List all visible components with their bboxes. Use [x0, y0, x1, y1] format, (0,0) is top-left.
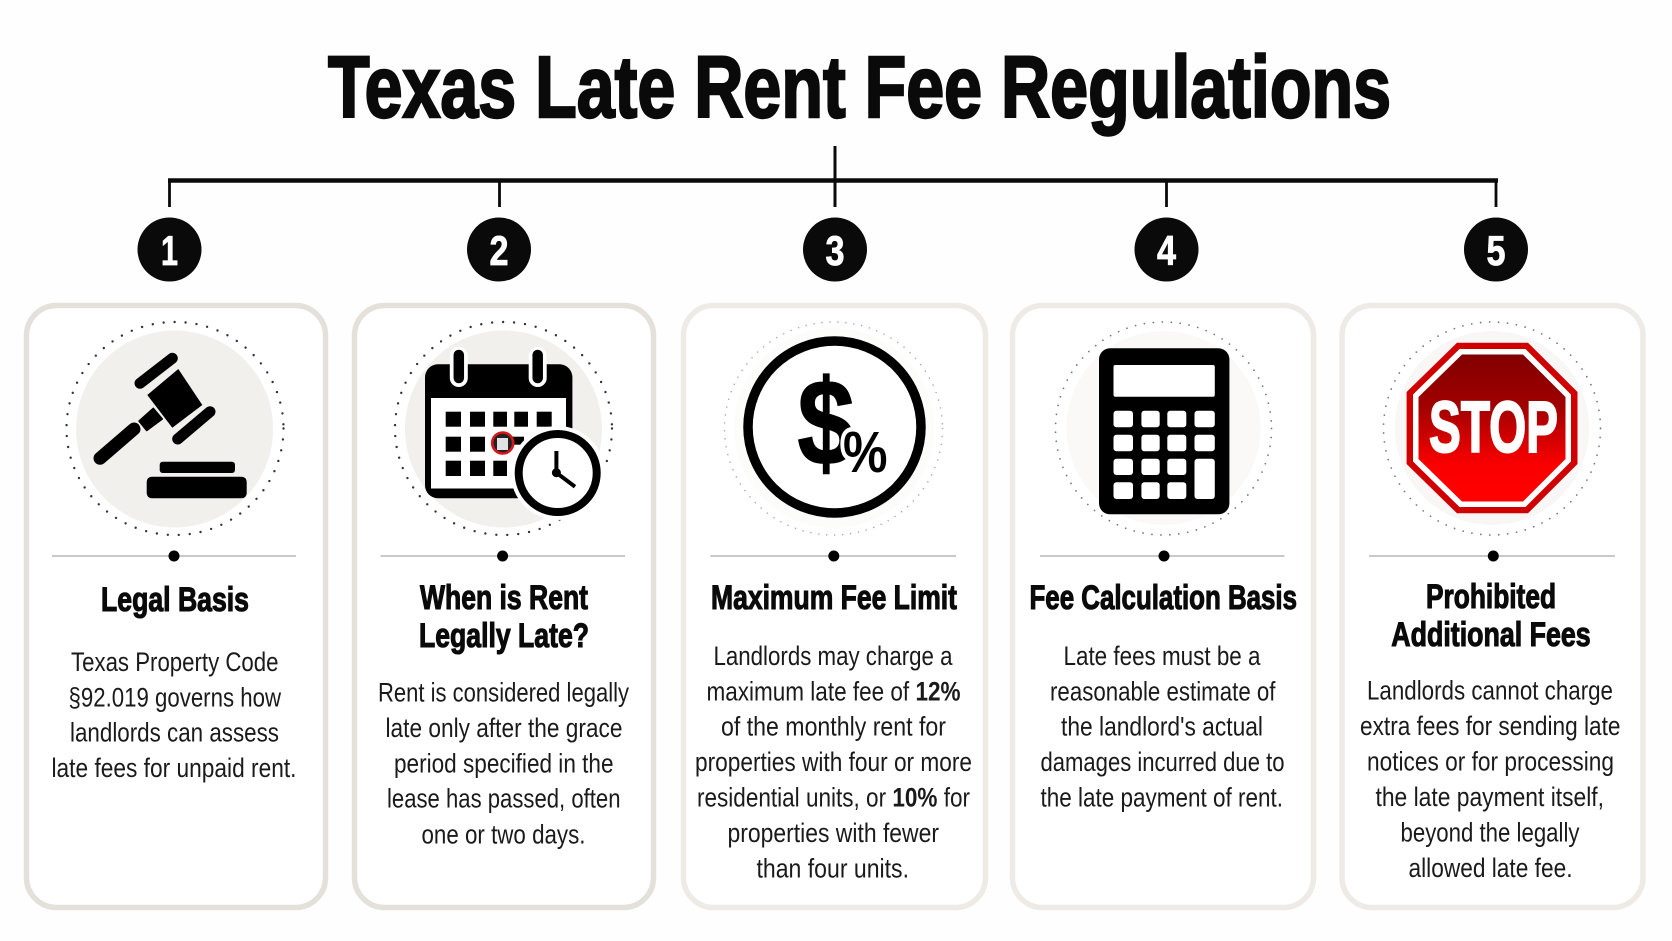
- divider: [52, 550, 296, 562]
- step number 1: [138, 218, 202, 282]
- body text: Landlords cannot charge: [1367, 675, 1613, 705]
- step number 5: 5: [1486, 227, 1506, 274]
- body text: Landlords may charge a: [714, 641, 953, 671]
- body text: beyond the legally: [1400, 818, 1580, 848]
- step number 5: [1464, 218, 1528, 282]
- step number 4: [1134, 218, 1198, 282]
- step number 3: [803, 218, 867, 282]
- body text: [378, 678, 630, 849]
- connector tree: [168, 146, 1498, 207]
- body text: damages incurred due to: [1040, 747, 1284, 777]
- body text: late only after the grace: [386, 713, 622, 743]
- heading: [1391, 578, 1591, 654]
- body text: Late fees must be a: [1064, 641, 1261, 671]
- icon: stop sign: STOP: [1429, 388, 1558, 468]
- divider: [1040, 550, 1284, 562]
- icon: dollar and percent: $: [798, 354, 854, 490]
- body text: the late payment of rent.: [1040, 782, 1283, 812]
- body text: extra fees for sending late: [1360, 711, 1620, 741]
- body text: maximum late fee of 12%: [706, 676, 960, 706]
- heading: [419, 579, 589, 655]
- step number 3: 3: [826, 227, 844, 274]
- body text: §92.019 governs how: [68, 682, 282, 712]
- step number 4: 4: [1157, 227, 1177, 274]
- body text: landlords can assess: [70, 718, 279, 748]
- icon: calendar and clock: [395, 322, 612, 535]
- title: Texas Late Rent Fee Regulations: [328, 39, 1391, 136]
- heading: Maximum Fee Limit: [711, 579, 957, 617]
- panel: fee calculation basis: [1012, 306, 1314, 908]
- heading: Additional Fees: [1391, 616, 1591, 654]
- body text: the landlord's actual: [1061, 712, 1263, 742]
- icon: gavel: [66, 322, 284, 535]
- body text: period specified in the: [394, 748, 614, 778]
- body text: than four units.: [756, 853, 909, 883]
- divider: [381, 550, 625, 562]
- divider: [1369, 550, 1615, 562]
- body text: late fees for unpaid rent.: [52, 753, 296, 783]
- body text: the late payment itself,: [1376, 782, 1604, 812]
- heading: Prohibited: [1426, 578, 1556, 616]
- body text: [1360, 675, 1620, 883]
- heading: When is Rent: [420, 579, 588, 617]
- heading: Fee Calculation Basis: [1030, 579, 1297, 617]
- panel: maximum fee limit: [684, 306, 986, 908]
- body text: allowed late fee.: [1408, 853, 1572, 883]
- heading: Legal Basis: [101, 581, 249, 619]
- body text: properties with fewer: [728, 818, 939, 848]
- body text: [1040, 641, 1284, 812]
- body text: residential units, or 10% for: [697, 782, 970, 812]
- step number 2: [467, 218, 531, 282]
- body text: notices or for processing: [1367, 746, 1614, 776]
- body text: reasonable estimate of: [1050, 676, 1276, 706]
- heading: Legally Late?: [419, 617, 589, 655]
- icon: dollar and percent: %: [843, 420, 888, 485]
- panel: legal basis: [26, 306, 326, 908]
- body text: properties with four or more: [695, 747, 972, 777]
- step number 2: 2: [490, 227, 508, 274]
- icon: stop sign: [1384, 322, 1600, 535]
- clock: [511, 426, 605, 520]
- body text: [695, 641, 972, 883]
- icon: dollar and percent: [724, 322, 942, 535]
- step number 1: 1: [161, 227, 178, 274]
- body text: Texas Property Code: [71, 647, 278, 677]
- body text: Rent is considered legally: [378, 678, 630, 708]
- highlighted date: [492, 432, 513, 454]
- icon: calculator: [1056, 322, 1272, 535]
- body text: of the monthly rent for: [721, 712, 946, 742]
- panel: prohibited additional fees: [1342, 306, 1643, 908]
- panel: when is rent legally late: [354, 306, 654, 908]
- body text: [52, 647, 296, 783]
- body text: lease has passed, often: [387, 784, 620, 814]
- divider: [710, 550, 956, 562]
- body text: one or two days.: [422, 819, 586, 849]
